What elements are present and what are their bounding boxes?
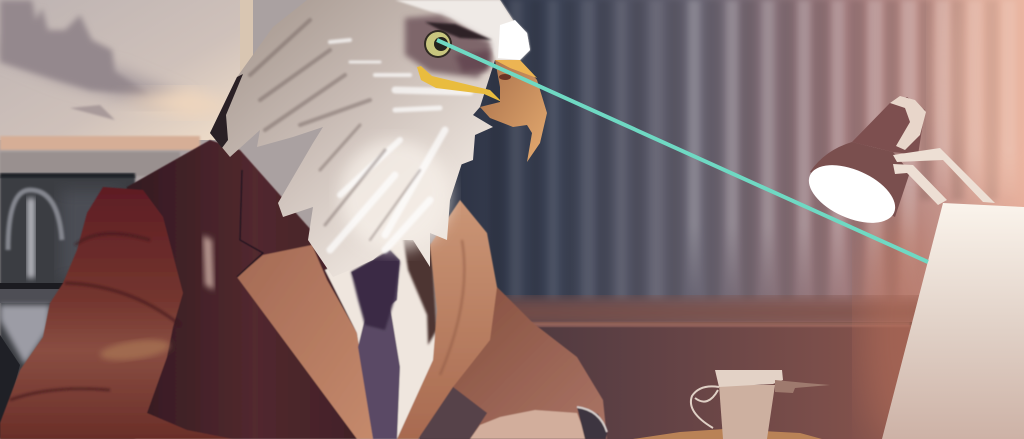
curtain folds, bright [688, 0, 1016, 300]
tie knot shadow [351, 250, 400, 330]
warm light glow [940, 0, 1024, 210]
panel: curtain background [440, 0, 1024, 322]
panel: left wall [0, 0, 460, 439]
necktie [351, 250, 400, 439]
white tuft [498, 20, 530, 60]
cream neck glow [340, 140, 450, 250]
hand on desk [470, 410, 587, 439]
feather streaks, white [330, 40, 470, 250]
laptop [882, 203, 1024, 439]
right lapel and jacket front [397, 200, 497, 439]
feather streaks, dark [250, 20, 420, 240]
shirt [325, 235, 437, 439]
right sleeve [453, 287, 607, 439]
suit jacket [0, 140, 607, 439]
desk lamp [800, 96, 995, 235]
curtain folds, dim [510, 0, 662, 300]
dark brow [425, 22, 492, 40]
sleeve highlight [99, 336, 171, 364]
yellow mouth line [417, 66, 502, 102]
nostril [499, 74, 511, 80]
white crown [395, 0, 530, 60]
lapel seam [440, 240, 464, 375]
dark nape feathers [210, 74, 243, 148]
eye [424, 30, 452, 58]
laser beam [437, 40, 928, 262]
curtain shadows [490, 0, 998, 300]
coffee cup [633, 370, 830, 439]
face mask shading [405, 15, 492, 78]
jacket sheen [203, 235, 214, 290]
left sleeve [0, 187, 233, 439]
eagle head [210, 0, 547, 277]
warm glow beside laptop [860, 210, 940, 439]
sleeve fold [10, 234, 180, 400]
background gap under sleeve [418, 387, 487, 439]
shirt cuff [577, 407, 607, 439]
shirt shadow [403, 238, 437, 345]
left lapel [237, 245, 373, 439]
collar line [237, 170, 263, 277]
jacket body [110, 140, 373, 439]
lower wall [420, 298, 1024, 439]
beak cere [495, 60, 537, 78]
wall strip below painting [0, 152, 180, 176]
beak [480, 60, 547, 162]
office chair [0, 173, 135, 439]
painting on wall [0, 0, 253, 150]
